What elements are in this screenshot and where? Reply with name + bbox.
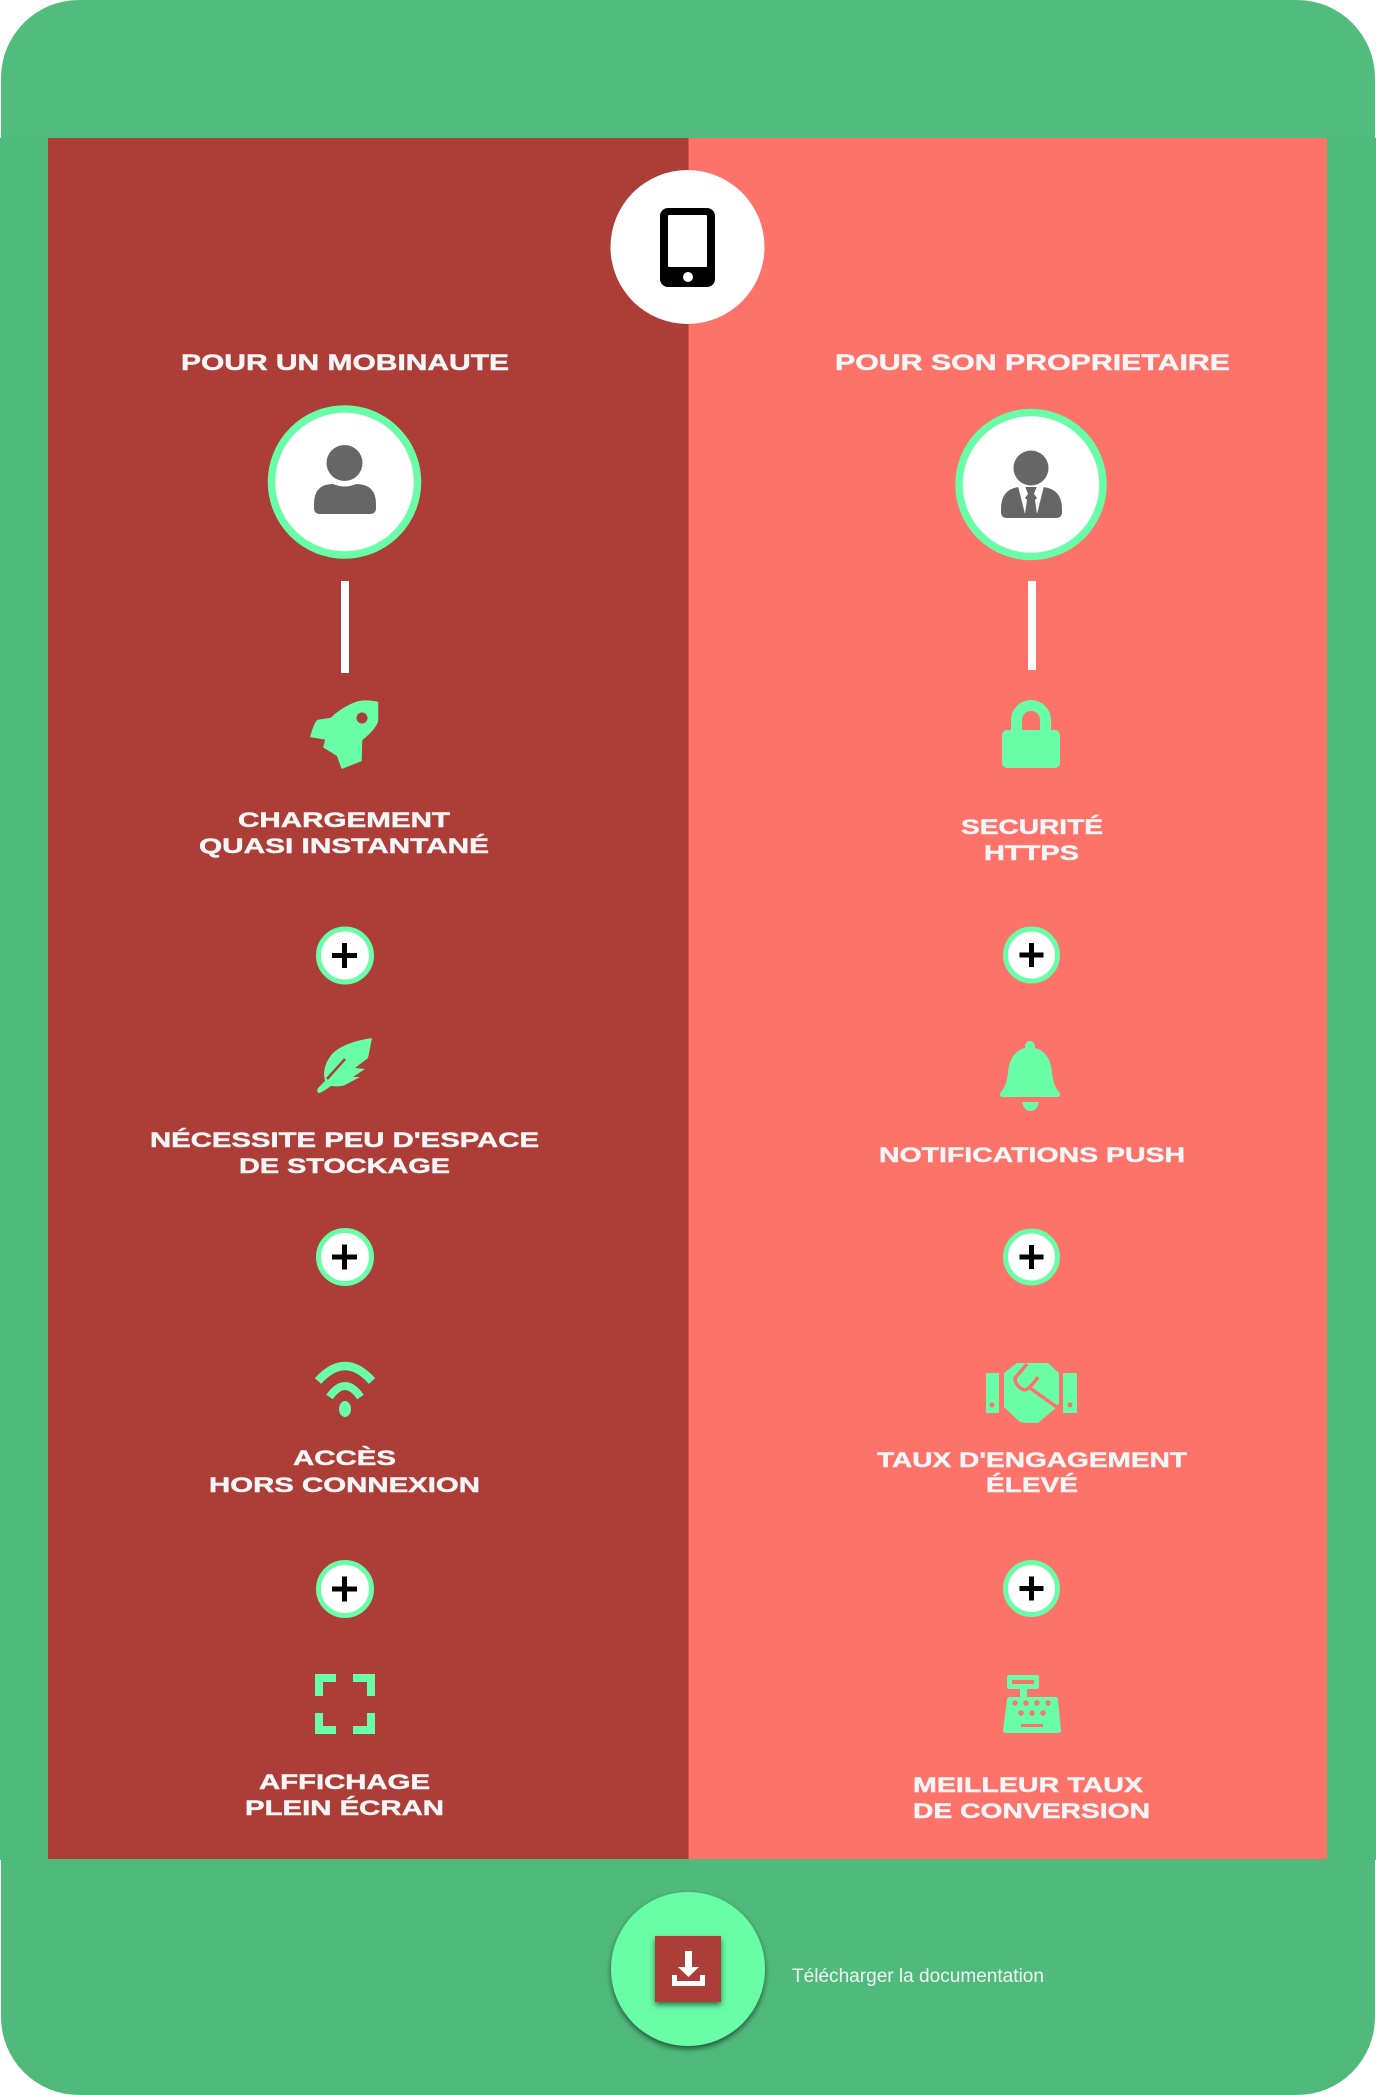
icon: plus bbox=[1006, 929, 1058, 981]
panel: pour un mobinaute bbox=[48, 138, 688, 1859]
icon: plus bbox=[1006, 1231, 1058, 1283]
label: meilleur taux de conversion: MEILLEUR TAUX bbox=[913, 1774, 1143, 1797]
label: chargement quasi instantané: QUASI INSTANTANÉ bbox=[199, 835, 489, 858]
icon: handshake bbox=[986, 1363, 1077, 1423]
icon: plus bbox=[318, 1230, 372, 1284]
label: meilleur taux de conversion: DE CONVERSION bbox=[913, 1800, 1150, 1823]
icon: plus bbox=[318, 929, 372, 982]
bottom green band bbox=[1, 1859, 1375, 2095]
top green band bbox=[1, 0, 1375, 140]
icon: download arrow bbox=[674, 1951, 702, 1984]
connector line bbox=[1028, 581, 1036, 670]
label: accès hors connexion: ACCÈS bbox=[293, 1447, 396, 1470]
label: accès hors connexion bbox=[209, 1447, 480, 1497]
icon: plus bbox=[1006, 1562, 1058, 1614]
label: nécessite peu d'espace de stockage: DE STOCKAGE bbox=[239, 1155, 450, 1178]
icon: user bbox=[272, 409, 418, 555]
left green strip bbox=[0, 138, 49, 1860]
label: chargement quasi instantané bbox=[199, 809, 489, 858]
panel: pour son proprietaire bbox=[688, 138, 1327, 1859]
download button bbox=[611, 1892, 765, 2046]
label: chargement quasi instantané: CHARGEMENT bbox=[238, 809, 450, 832]
label: taux d'engagement élevé: ÉLEVÉ bbox=[986, 1474, 1078, 1497]
heading: pour un mobinaute: POUR UN MOBINAUTE bbox=[181, 350, 509, 375]
label: nécessite peu d'espace de stockage bbox=[150, 1129, 539, 1178]
icon: feather bbox=[317, 1038, 372, 1093]
icon: businessman bbox=[959, 412, 1103, 556]
label: taux d'engagement élevé: TAUX D'ENGAGEMENT bbox=[877, 1449, 1187, 1472]
heading: pour son proprietaire: POUR SON PROPRIETAIRE bbox=[835, 350, 1230, 375]
label: affichage plein écran bbox=[245, 1771, 444, 1820]
label: affichage plein écran: PLEIN ÉCRAN bbox=[245, 1797, 444, 1820]
icon: cash register bbox=[1003, 1675, 1061, 1733]
icon: padlock bbox=[1002, 706, 1060, 768]
label: taux d'engagement élevé bbox=[877, 1449, 1187, 1497]
label: securité https bbox=[961, 816, 1103, 865]
icon: fullscreen bbox=[319, 1678, 371, 1730]
label: affichage plein écran: AFFICHAGE bbox=[259, 1771, 430, 1794]
icon: plus bbox=[318, 1562, 372, 1616]
connector line bbox=[341, 581, 349, 673]
right green strip bbox=[1327, 138, 1376, 1860]
label: securité https: HTTPS bbox=[984, 842, 1079, 865]
label: accès hors connexion: HORS CONNEXION bbox=[209, 1474, 480, 1497]
label: notifications push: NOTIFICATIONS PUSH bbox=[879, 1144, 1185, 1167]
label: securité https: SECURITÉ bbox=[961, 816, 1103, 839]
icon: phone badge bbox=[610, 170, 764, 324]
icon: bell bbox=[1000, 1041, 1060, 1111]
label: nécessite peu d'espace de stockage: NÉCESSITE PEU D'ESPACE bbox=[150, 1129, 539, 1152]
label: meilleur taux de conversion bbox=[913, 1774, 1150, 1823]
download label: Télécharger la documentation bbox=[792, 1965, 1044, 1987]
icon: rocket bbox=[311, 701, 378, 768]
icon: wifi bbox=[318, 1366, 372, 1417]
